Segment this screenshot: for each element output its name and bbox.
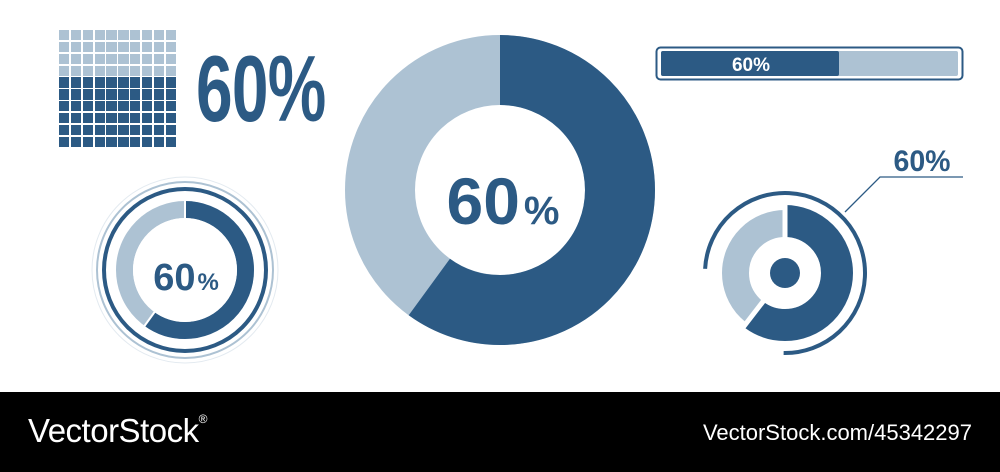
gauge chart with callout bbox=[701, 145, 963, 357]
big percentage text: 60% bbox=[196, 36, 326, 141]
footer bar bbox=[0, 392, 1000, 472]
center donut chart bbox=[380, 70, 620, 310]
callout line bbox=[845, 177, 963, 212]
small ringed donut bbox=[92, 177, 278, 363]
callout label: 60% bbox=[893, 145, 951, 178]
small donut label: 60% bbox=[153, 257, 219, 299]
footer url: VectorStock.com/45342297 bbox=[703, 420, 972, 445]
center label: 60% bbox=[446, 164, 560, 238]
footer logo: VectorStock® bbox=[28, 412, 207, 449]
progress label: 60% bbox=[732, 55, 770, 76]
waffle chart grid bbox=[59, 30, 176, 147]
progress bar bbox=[656, 48, 962, 80]
waffle chart bbox=[0, 0, 175, 146]
